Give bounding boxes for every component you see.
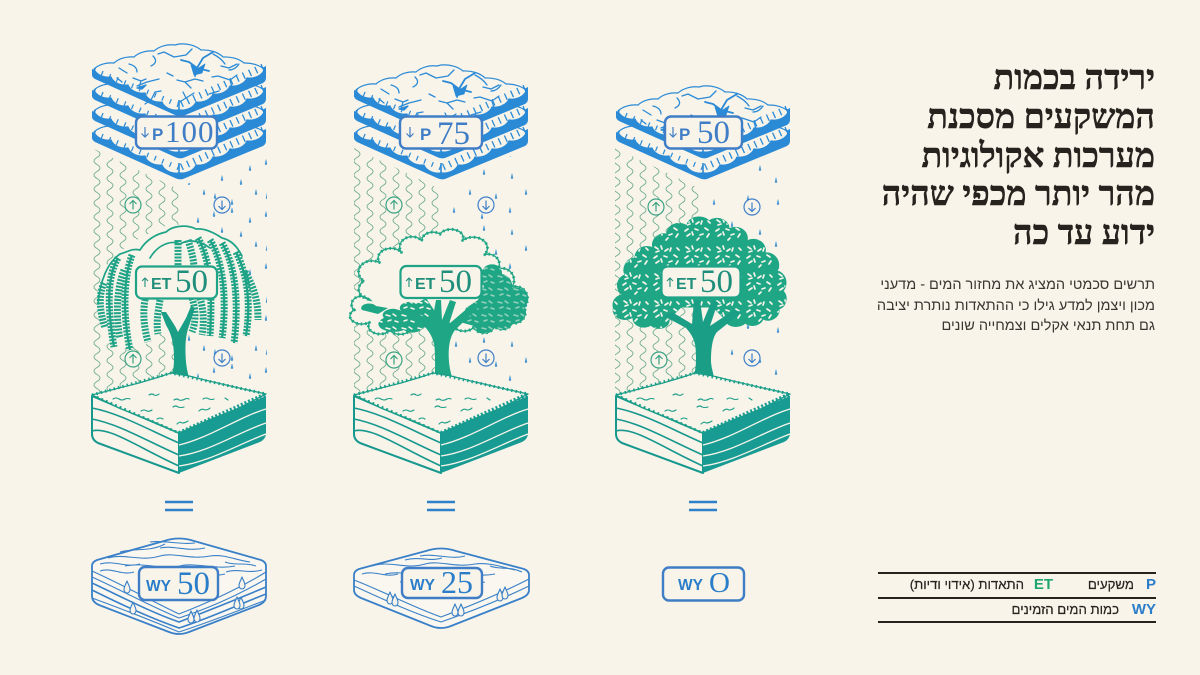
title — [882, 60, 1155, 252]
rain drops — [445, 148, 529, 392]
WY badge — [139, 566, 218, 602]
column: precipitation 75 — [350, 65, 529, 628]
cloud stack — [616, 86, 790, 179]
column: precipitation 100 — [92, 44, 267, 634]
WY badge: WY — [146, 578, 172, 595]
ET badge: 50 — [439, 264, 472, 300]
P badge: P — [420, 125, 431, 144]
equals sign — [689, 502, 717, 510]
dense-leaf tree — [613, 217, 786, 388]
P badge: P — [152, 125, 163, 144]
rain drops — [183, 148, 267, 392]
vapor squiggles — [92, 148, 180, 396]
legend: משקעים — [1088, 577, 1134, 592]
WY badge — [402, 564, 482, 600]
P badge — [400, 116, 482, 152]
P badge — [136, 114, 217, 149]
description text: מכון ויצמן למדע גילו כי ההתאדות נותרת יציבה — [877, 298, 1155, 314]
ET badge: ET — [151, 276, 172, 293]
legend — [878, 572, 1156, 623]
P badge: 100 — [165, 114, 214, 149]
ET badge: ET — [415, 276, 436, 293]
WY badge: O — [709, 567, 730, 599]
vapor squiggles — [354, 148, 442, 396]
ET badge: 50 — [175, 264, 208, 300]
title: ידוע עד כה — [1013, 215, 1155, 252]
legend: WY — [1132, 601, 1156, 618]
evaporation arrows — [648, 199, 667, 368]
vapor squiggles — [615, 148, 703, 396]
water block — [354, 548, 529, 628]
ET badge: ET — [676, 276, 697, 293]
evaporation arrows — [125, 197, 141, 367]
ET badge — [136, 264, 217, 300]
ET badge: 50 — [700, 264, 733, 300]
legend: P — [1146, 576, 1156, 593]
willow tree — [97, 225, 261, 388]
description text — [877, 277, 1155, 334]
title: ירידה בכמות — [993, 60, 1155, 97]
WY badge: WY — [678, 577, 704, 594]
legend: התאדות (אידוי ודיות) — [910, 577, 1024, 592]
legend: ET — [1034, 576, 1053, 593]
rain arrows — [744, 199, 760, 366]
title: מהר יותר מכפי שהיה — [882, 176, 1155, 213]
P badge: 50 — [697, 115, 730, 151]
WY badge: 50 — [177, 566, 210, 602]
title: המשקעים מסכנת — [927, 99, 1155, 136]
broadleaf tree — [350, 229, 528, 388]
P badge — [665, 115, 742, 151]
ground block — [354, 373, 528, 473]
WY badge: 25 — [441, 564, 473, 600]
ground block — [616, 373, 790, 473]
ET badge — [662, 264, 740, 300]
equals sign — [165, 502, 193, 510]
rain arrows — [478, 197, 494, 366]
water block — [92, 538, 266, 634]
ET badge — [400, 264, 482, 300]
WY badge: WY — [410, 577, 436, 594]
rain arrows — [214, 197, 230, 366]
legend: כמות המים הזמינים — [1012, 602, 1119, 617]
rain drops — [707, 148, 791, 392]
cloud stack — [92, 44, 266, 179]
column: precipitation 50 — [613, 86, 791, 601]
equals sign — [427, 502, 455, 510]
cloud stack — [354, 65, 528, 179]
description text: תרשים סכמטי המציג את מחזור המים - מדעני — [880, 277, 1155, 293]
P badge: 75 — [437, 116, 470, 152]
description text: גם תחת תנאי אקלים וצמחייה שונים — [942, 318, 1155, 334]
P badge: P — [679, 125, 690, 144]
title: מערכות אקולוגיות — [921, 138, 1155, 175]
WY badge — [663, 567, 744, 600]
ground block — [92, 373, 266, 473]
evaporation arrows — [386, 197, 402, 368]
